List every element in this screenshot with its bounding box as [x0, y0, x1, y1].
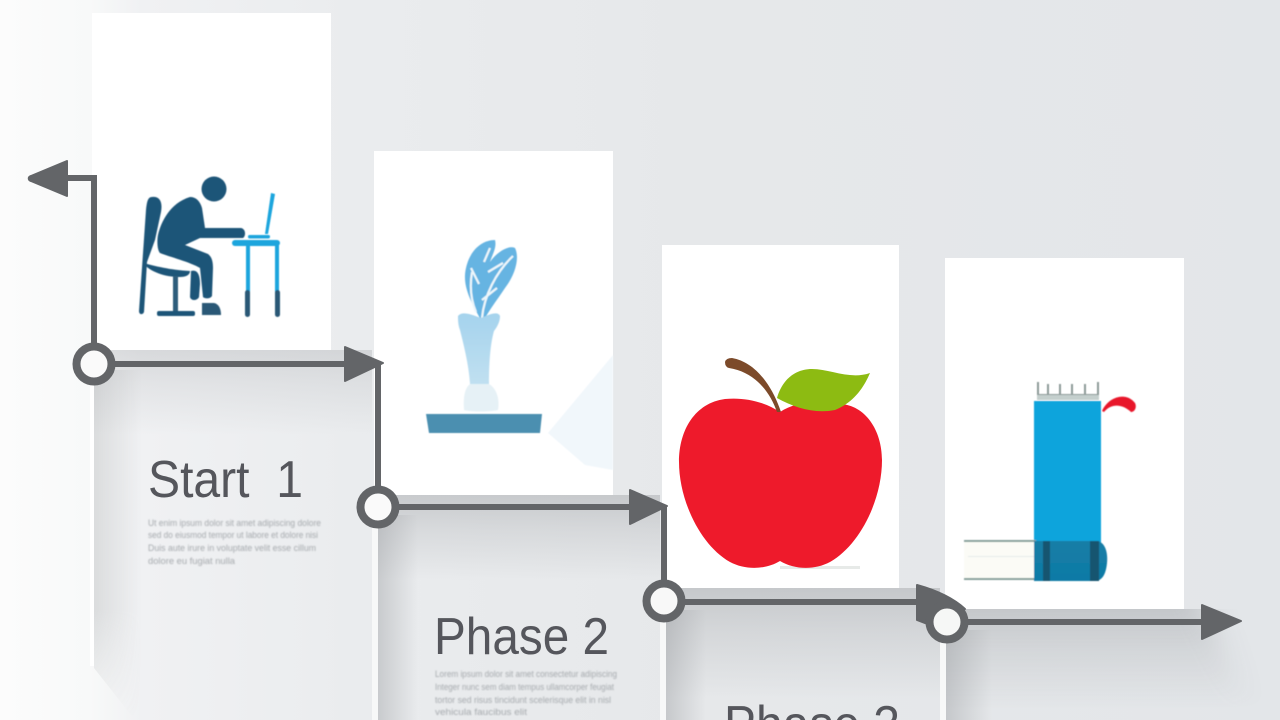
- timeline node: phase 2: [360, 490, 396, 524]
- icon: red apple with green leaf: [679, 358, 882, 568]
- icon: blue inhaler with book: [964, 382, 1136, 581]
- timeline arrow: phase 2 to phase 3: [379, 490, 667, 601]
- timeline node: start: [76, 346, 112, 382]
- text block: phase 2 description: vehicula faucibus elit: [435, 707, 527, 718]
- heading: start 1: Start 1: [148, 451, 303, 509]
- card: phase 4: [945, 258, 1184, 609]
- timeline node: phase 3: [646, 584, 682, 618]
- text block: start description: Duis aute irure in voluptate velit esse cillum: [148, 543, 316, 554]
- icon: person working at a laptop: [139, 176, 280, 317]
- card: phase 3: [662, 245, 899, 588]
- card: phase 2: [374, 151, 613, 495]
- panel: phase 4 lower sheet: [940, 609, 1226, 720]
- panel: phase 3 lower sheet: [660, 588, 940, 720]
- timeline arrow: start up arrow: [29, 161, 94, 364]
- panel: start lower sheet: [90, 350, 372, 720]
- text block: start description: sed do eiusmod tempor ut labore et dolore nisi: [148, 530, 318, 541]
- text block: phase 2 description: [434, 669, 618, 718]
- timeline arrow: final arrow: [947, 605, 1241, 639]
- panel: phase 2 lower sheet: [372, 495, 660, 720]
- timeline node: phase 4: [930, 604, 964, 640]
- timeline arrow: phase 3 to phase 4: [664, 585, 965, 625]
- text block: start description: dolore eu fugiat nulla: [148, 556, 236, 567]
- text block: start description: [148, 518, 321, 567]
- text block: start description: Ut enim ipsum dolor sit amet adipiscing dolore: [148, 518, 321, 529]
- heading: phase 2: Phase 2: [434, 608, 609, 666]
- card: start: [92, 13, 331, 350]
- timeline arrow: start to phase 2: [94, 347, 383, 507]
- icon: feather in a vase: [426, 240, 542, 433]
